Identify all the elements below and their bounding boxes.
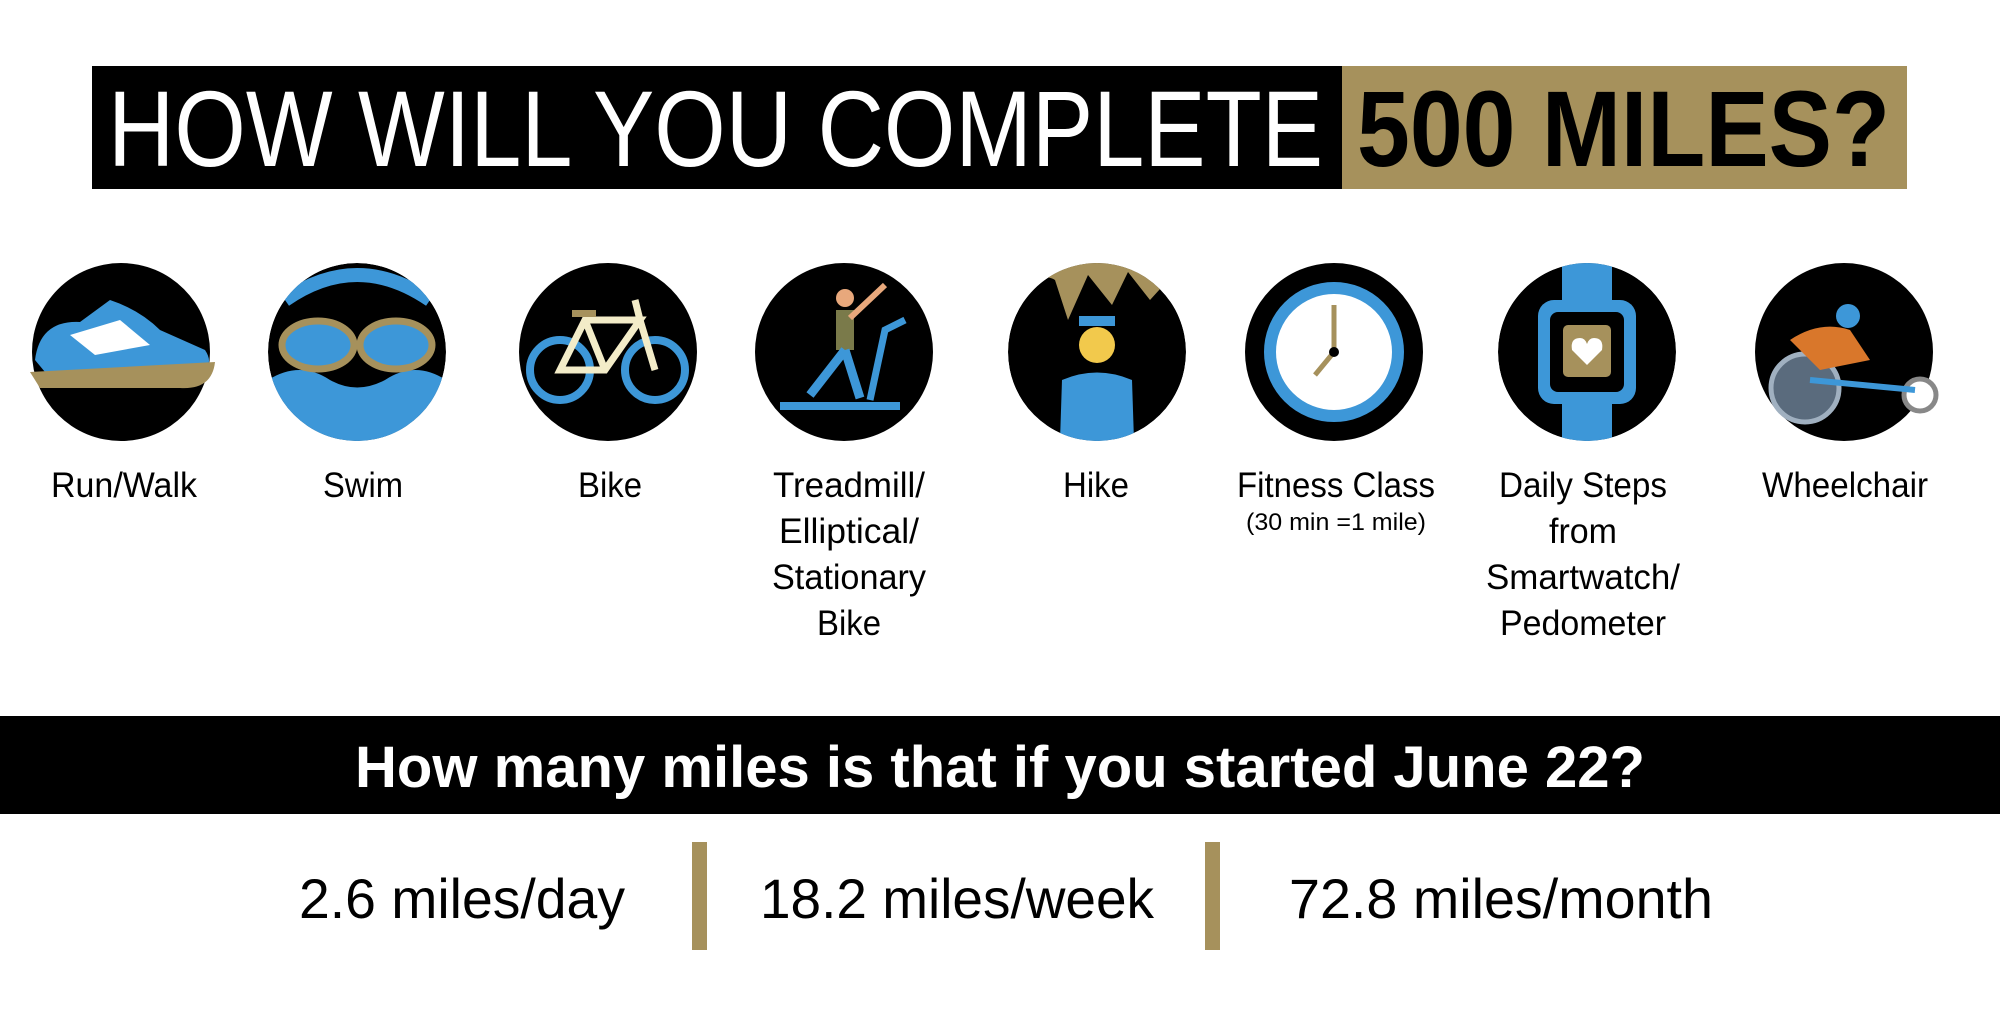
- icon: wheelchair: [1755, 263, 1936, 441]
- activity labels: Pedometer: [1500, 604, 1666, 643]
- stats: 72.8 miles/month: [1289, 867, 1713, 930]
- stats: 2.6 miles/day: [299, 867, 625, 930]
- title: 500 MILES?: [1357, 68, 1890, 189]
- activity labels: Wheelchair: [1762, 466, 1928, 505]
- activity labels: (30 min =1 mile): [1246, 509, 1426, 536]
- stats: 18.2 miles/week: [760, 867, 1155, 930]
- icon: run/walk shoe: [30, 263, 215, 441]
- activity labels: from: [1549, 512, 1617, 551]
- icon: treadmill: [755, 263, 933, 441]
- stats: [299, 842, 1713, 950]
- activity labels: Daily Steps: [1499, 466, 1667, 505]
- activity labels: Fitness Class: [1237, 466, 1435, 505]
- activity labels: Smartwatch/: [1486, 558, 1680, 597]
- question band: [0, 716, 2000, 814]
- activity labels: Treadmill/: [773, 466, 925, 505]
- icon: fitness class clock: [1245, 263, 1423, 441]
- title: HOW WILL YOU COMPLETE: [108, 68, 1323, 189]
- activity labels: Hike: [1063, 466, 1129, 505]
- question band: How many miles is that if you started June 22?: [355, 735, 1645, 800]
- activity labels: Elliptical/: [779, 512, 919, 551]
- icon: swim goggles: [268, 263, 446, 441]
- icon: hike: [1008, 262, 1186, 441]
- activity labels: [51, 466, 1928, 643]
- activity labels: Run/Walk: [51, 466, 197, 505]
- icon: bike: [519, 263, 697, 441]
- activity labels: Bike: [578, 466, 642, 505]
- activity labels: Swim: [323, 466, 403, 505]
- icon: smartwatch: [1498, 262, 1676, 442]
- activity labels: Stationary: [772, 558, 926, 597]
- activity labels: Bike: [817, 604, 881, 643]
